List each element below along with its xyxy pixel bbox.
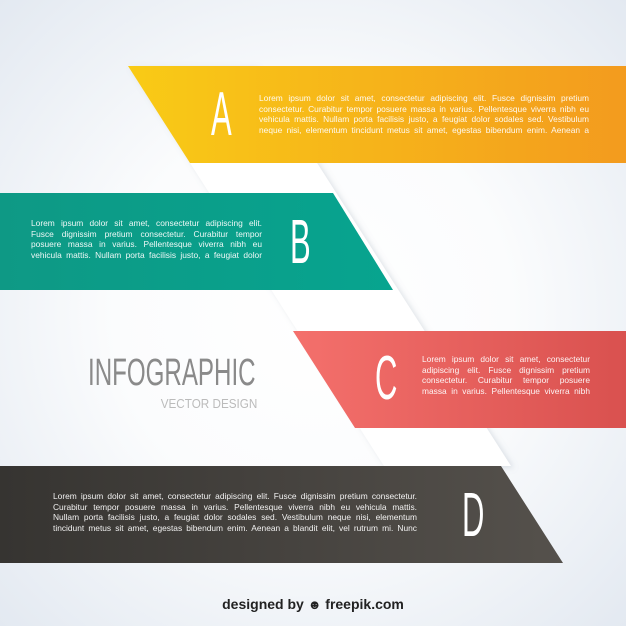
text A	[259, 93, 589, 135]
text B: Lorem ipsum dolor sit amet, consectetur adipiscing elit.	[31, 218, 262, 228]
text D: tincidunt metus sit amet, egestas bibendum enim. Aenean a blandit elit, vel rutrum mi. Nunc	[53, 523, 417, 533]
text C: massa in varius. Pellentesque viverra nibh	[422, 386, 590, 396]
text B: posuere massa in varius. Pellentesque viverra nibh eu	[31, 239, 262, 249]
white diagonal strip	[128, 66, 511, 466]
footer credit: designed by ☻ freepik.com	[222, 596, 404, 612]
text B	[31, 218, 262, 260]
band B	[0, 193, 393, 290]
letter C: C	[375, 344, 397, 413]
text B: Fusce dignissim pretium consectetur. Curabitur tempor	[31, 229, 262, 239]
letter A: A	[211, 80, 232, 149]
band C	[293, 331, 626, 428]
text B: vehicula mattis. Nullam porta facilisis justo, a feugiat dolor	[31, 250, 262, 260]
text C: adipiscing elit. Fusce dignissim pretium	[422, 365, 590, 375]
title: INFOGRAPHIC	[88, 352, 256, 394]
text C: Lorem ipsum dolor sit amet, consectetur	[422, 354, 590, 364]
text A: Lorem ipsum dolor sit amet, consectetur adipiscing elit. Fusce dignissim pretium	[259, 93, 589, 103]
text D	[53, 491, 417, 533]
band D	[0, 466, 563, 563]
text A: consectetur. Curabitur tempor posuere massa in varius. Pellentesque viverra nibh eu	[259, 104, 589, 114]
text D: Lorem ipsum dolor sit amet, consectetur adipiscing elit. Fusce dignissim pretium consectetur.	[53, 491, 417, 501]
text D: Nullam porta facilisis justo, a feugiat dolor sodales sed. Vestibulum neque nisi, elementum	[53, 512, 417, 522]
letter B: B	[290, 208, 311, 277]
text C	[422, 354, 590, 396]
text C: consectetur. Curabitur tempor posuere	[422, 375, 590, 385]
text D: Curabitur tempor posuere massa in varius. Pellentesque viverra nibh eu vehicula mattis.	[53, 502, 417, 512]
text A: neque nisi, elementum tincidunt metus sit amet, egestas bibendum enim. Aenean a	[259, 125, 589, 135]
band A	[128, 66, 626, 163]
subtitle: VECTOR DESIGN	[161, 396, 257, 411]
text A: vehicula mattis. Nullam porta facilisis justo, a feugiat dolor sodales sed. Vestibulum	[259, 114, 589, 124]
letter D: D	[462, 481, 484, 550]
